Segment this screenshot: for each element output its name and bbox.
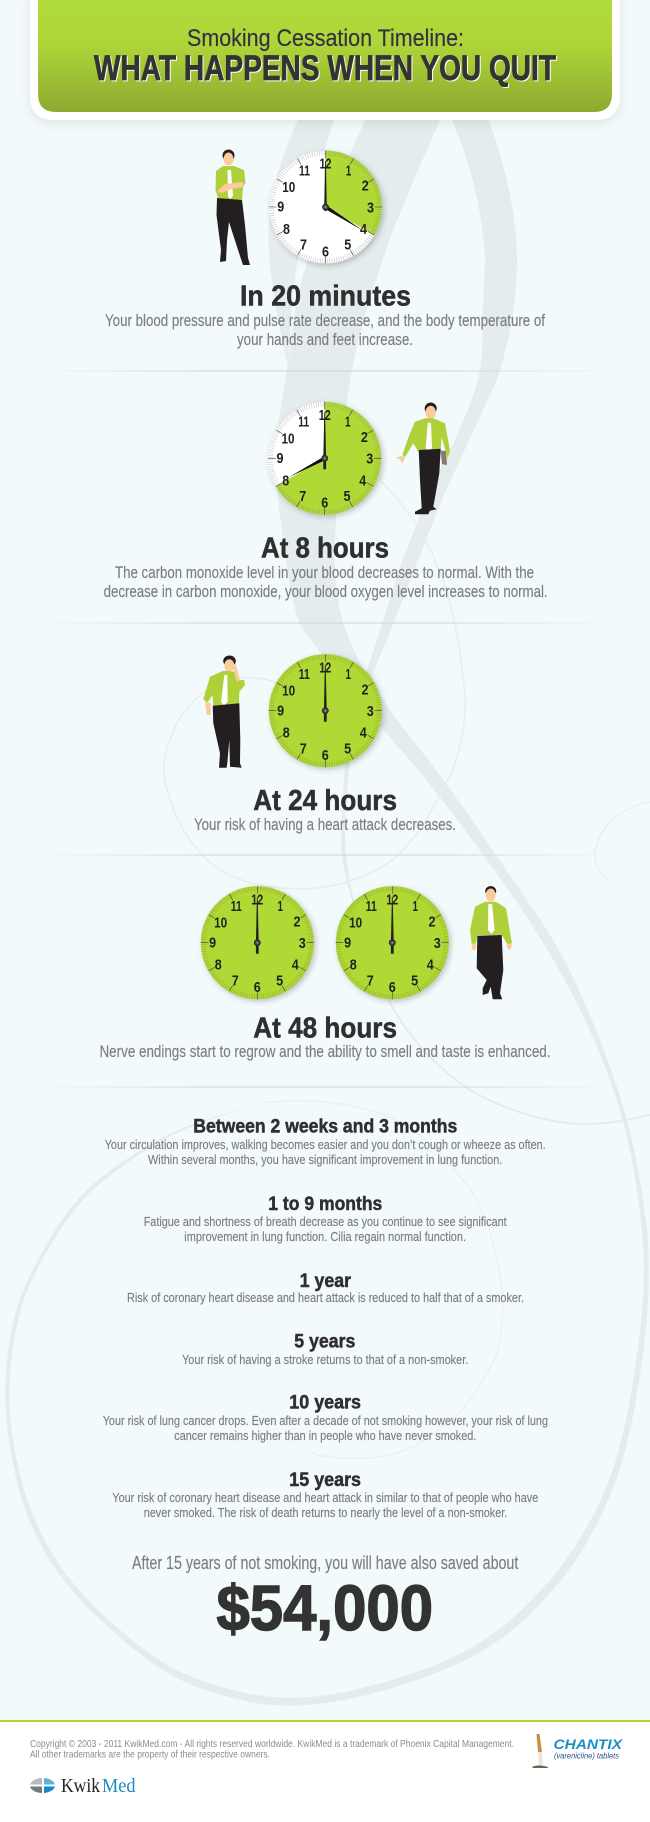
footer green rule bbox=[0, 1720, 650, 1722]
clock: 48 hours, second: 12 bbox=[386, 892, 398, 908]
description: Nerve endings start to regrow and the ability to smell and taste is enhanced. bbox=[100, 1043, 550, 1061]
KwikMed logo bbox=[30, 1775, 136, 1797]
clock: 20 minutes: 11 bbox=[299, 163, 310, 179]
clock: 48 hours, first: 10 bbox=[214, 916, 227, 932]
clock: 8 hours: 5 bbox=[344, 489, 351, 505]
clock: 24 hours: 3 bbox=[367, 704, 374, 720]
clock: 48 hours, first bbox=[201, 886, 314, 999]
clock: 24 hours: 4 bbox=[360, 726, 367, 742]
clock: 20 minutes bbox=[269, 150, 382, 264]
clock: 20 minutes: 4 bbox=[360, 222, 367, 238]
clock: 48 hours, first: 7 bbox=[232, 973, 239, 989]
description: decrease in carbon monoxide, your blood oxygen level increases to normal. bbox=[104, 583, 548, 601]
savings amount: $54,000 bbox=[216, 1572, 433, 1644]
clock: 20 minutes: 8 bbox=[283, 222, 290, 238]
person: hand on face bbox=[203, 656, 245, 768]
milestone: 1 year bbox=[127, 1270, 524, 1305]
copyright text bbox=[30, 1738, 514, 1760]
clock: 8 hours: 2 bbox=[361, 430, 368, 446]
clock: 48 hours, first: 8 bbox=[215, 958, 222, 974]
panel: longer-term milestones bbox=[103, 1116, 548, 1520]
milestone: 2 weeks to 3 months bbox=[105, 1116, 546, 1167]
milestone: 15 years: Your risk of coronary heart disease and heart attack in similar to that of people who have bbox=[112, 1490, 538, 1505]
milestone: 15 years bbox=[112, 1469, 538, 1520]
clock: 20 minutes: 12 bbox=[320, 157, 332, 173]
description: your hands and feet increase. bbox=[237, 331, 413, 349]
clock: 48 hours, second: 11 bbox=[366, 899, 377, 915]
clock: 8 hours: 8 bbox=[282, 473, 289, 489]
clock: 8 hours bbox=[268, 402, 381, 515]
clock: 20 minutes: 7 bbox=[300, 238, 307, 254]
clock: 48 hours, first: 2 bbox=[293, 914, 300, 930]
clock: 48 hours, first: 12 bbox=[251, 892, 263, 908]
panel: at 48 hours bbox=[100, 886, 550, 1061]
milestone: 1 year: Risk of coronary heart disease and heart attack is reduced to half that of a smoker. bbox=[127, 1290, 524, 1305]
milestone: 1 to 9 months bbox=[144, 1193, 507, 1244]
clock: 48 hours, first: 4 bbox=[292, 958, 299, 974]
panel: in 20 minutes bbox=[105, 150, 545, 349]
milestone: 15 years: never smoked. The risk of death returns to nearly the level of a non-smoker. bbox=[144, 1505, 507, 1520]
milestone: 5 years: Your risk of having a stroke returns to that of a non-smoker. bbox=[182, 1352, 468, 1367]
clock: 48 hours, second: 2 bbox=[428, 914, 435, 930]
clock: 48 hours, second: 1 bbox=[413, 899, 418, 915]
clock: 20 minutes: 10 bbox=[282, 180, 295, 196]
clock: 8 hours: 4 bbox=[359, 473, 366, 489]
clock: 48 hours, second: 10 bbox=[349, 916, 362, 932]
milestone: 2 weeks to 3 months: Between 2 weeks and 3 months bbox=[193, 1116, 457, 1138]
clock: 20 minutes: 9 bbox=[277, 200, 284, 216]
clock: 24 hours: 6 bbox=[322, 748, 329, 764]
clock: 8 hours: 7 bbox=[299, 489, 306, 505]
clock: 48 hours, first: 3 bbox=[299, 936, 306, 952]
clock: 24 hours: 5 bbox=[344, 741, 351, 757]
milestone: 5 years: 5 years bbox=[294, 1331, 355, 1353]
person: arms crossed bbox=[216, 150, 250, 265]
milestone: 2 weeks to 3 months: Within several months, you have significant improvement in lung function. bbox=[148, 1152, 502, 1167]
clock: 48 hours, second: 7 bbox=[367, 973, 374, 989]
Chantix logo bbox=[554, 1737, 623, 1760]
KwikMed logo: Kwik bbox=[61, 1775, 100, 1797]
clock: 24 hours: 8 bbox=[283, 726, 290, 742]
description: Your blood pressure and pulse rate decrease, and the body temperature of bbox=[105, 312, 545, 330]
milestone: 10 years: Your risk of lung cancer drops. Even after a decade of not smoking however, your risk of lung bbox=[103, 1413, 548, 1428]
savings callout bbox=[132, 1552, 518, 1644]
clock: 24 hours: 9 bbox=[277, 703, 284, 719]
footer background bbox=[0, 1720, 650, 1822]
clock: 48 hours, second: 4 bbox=[427, 958, 434, 974]
person: walking bbox=[470, 886, 512, 999]
heading: At 24 hours bbox=[253, 785, 397, 817]
clock: 8 hours: 1 bbox=[345, 415, 350, 431]
cigarette icon bbox=[532, 1734, 548, 1768]
description bbox=[105, 312, 545, 349]
clock: 20 minutes: 2 bbox=[362, 179, 369, 195]
clock: 48 hours, first: 6 bbox=[254, 980, 261, 996]
clock: 48 hours, first: 1 bbox=[278, 899, 283, 915]
Chantix logo: CHANTIX bbox=[554, 1737, 623, 1752]
KwikMed logo: Med bbox=[102, 1775, 136, 1797]
header white frame bbox=[30, 0, 620, 120]
clock: 20 minutes: 5 bbox=[344, 238, 351, 254]
heading: In 20 minutes bbox=[240, 281, 411, 313]
title line one: Smoking Cessation Timeline: bbox=[187, 25, 464, 52]
clock: 48 hours, second: 5 bbox=[411, 973, 418, 989]
heading: At 8 hours bbox=[261, 533, 389, 565]
milestone: 10 years: cancer remains higher than in people who have never smoked. bbox=[174, 1428, 476, 1443]
clock: 24 hours: 2 bbox=[361, 682, 368, 698]
footer bbox=[0, 1720, 650, 1822]
clock: 8 hours: 10 bbox=[282, 431, 295, 447]
savings lead-in: After 15 years of not smoking, you will have also saved about bbox=[132, 1552, 518, 1573]
milestone: 15 years: 15 years bbox=[289, 1469, 361, 1491]
clock: 8 hours: 6 bbox=[321, 496, 328, 512]
description bbox=[104, 564, 548, 601]
header panel bbox=[30, 0, 620, 120]
panel: at 8 hours bbox=[104, 402, 548, 601]
milestone: 1 to 9 months: improvement in lung function. Cilia regain normal function. bbox=[184, 1229, 466, 1244]
clock: 48 hours, second: 8 bbox=[350, 958, 357, 974]
Chantix logo: (varenicline) tablets bbox=[554, 1750, 620, 1760]
clock: 24 hours bbox=[269, 654, 382, 767]
header green band bbox=[38, 0, 612, 112]
clock: 24 hours: 7 bbox=[300, 741, 307, 757]
clock: 20 minutes: 3 bbox=[367, 200, 374, 216]
clock: 8 hours: 9 bbox=[277, 451, 284, 467]
clock: 20 minutes: 6 bbox=[322, 244, 329, 260]
clock: 48 hours, first: 9 bbox=[209, 935, 216, 951]
clock: 48 hours, second: 9 bbox=[344, 935, 351, 951]
clock: 8 hours: 12 bbox=[319, 408, 331, 424]
clock: 8 hours: 3 bbox=[366, 452, 373, 468]
milestone: 2 weeks to 3 months: Your circulation improves, walking becomes easier and you don’t cough or wheeze as often. bbox=[105, 1137, 546, 1152]
clock: 48 hours, first: 5 bbox=[276, 973, 283, 989]
clock: 24 hours: 11 bbox=[299, 667, 310, 683]
clock: 24 hours: 12 bbox=[319, 660, 331, 676]
clock: 48 hours, second bbox=[336, 886, 449, 999]
clock: 8 hours: 11 bbox=[298, 415, 309, 431]
milestone: 1 year: 1 year bbox=[300, 1270, 351, 1292]
milestone: 5 years bbox=[182, 1331, 468, 1367]
milestone: 10 years bbox=[103, 1392, 548, 1443]
milestone: 1 to 9 months: 1 to 9 months bbox=[268, 1193, 382, 1215]
clock: 48 hours, second: 6 bbox=[389, 980, 396, 996]
copyright text: All other trademarks are the property of their respective owners. bbox=[30, 1748, 270, 1760]
person: holding folder bbox=[396, 402, 450, 514]
panel: at 24 hours bbox=[194, 654, 456, 834]
clock: 20 minutes: 1 bbox=[346, 163, 351, 179]
clock: 24 hours: 10 bbox=[282, 684, 295, 700]
clock: 24 hours: 1 bbox=[346, 667, 351, 683]
description: The carbon monoxide level in your blood decreases to normal. With the bbox=[115, 564, 534, 582]
milestone: 10 years: 10 years bbox=[289, 1392, 361, 1414]
copyright text: Copyright © 2003 - 2011 KwikMed.com - All rights reserved worldwide. KwikMed is a trademark of Phoenix Capital Management. bbox=[30, 1738, 514, 1750]
clock: 48 hours, second: 3 bbox=[434, 936, 441, 952]
description: Your risk of having a heart attack decreases. bbox=[194, 816, 456, 834]
clock: 48 hours, first: 11 bbox=[231, 899, 242, 915]
heading: At 48 hours bbox=[253, 1012, 397, 1044]
milestone: 1 to 9 months: Fatigue and shortness of breath decrease as you continue to see significant bbox=[144, 1214, 507, 1229]
